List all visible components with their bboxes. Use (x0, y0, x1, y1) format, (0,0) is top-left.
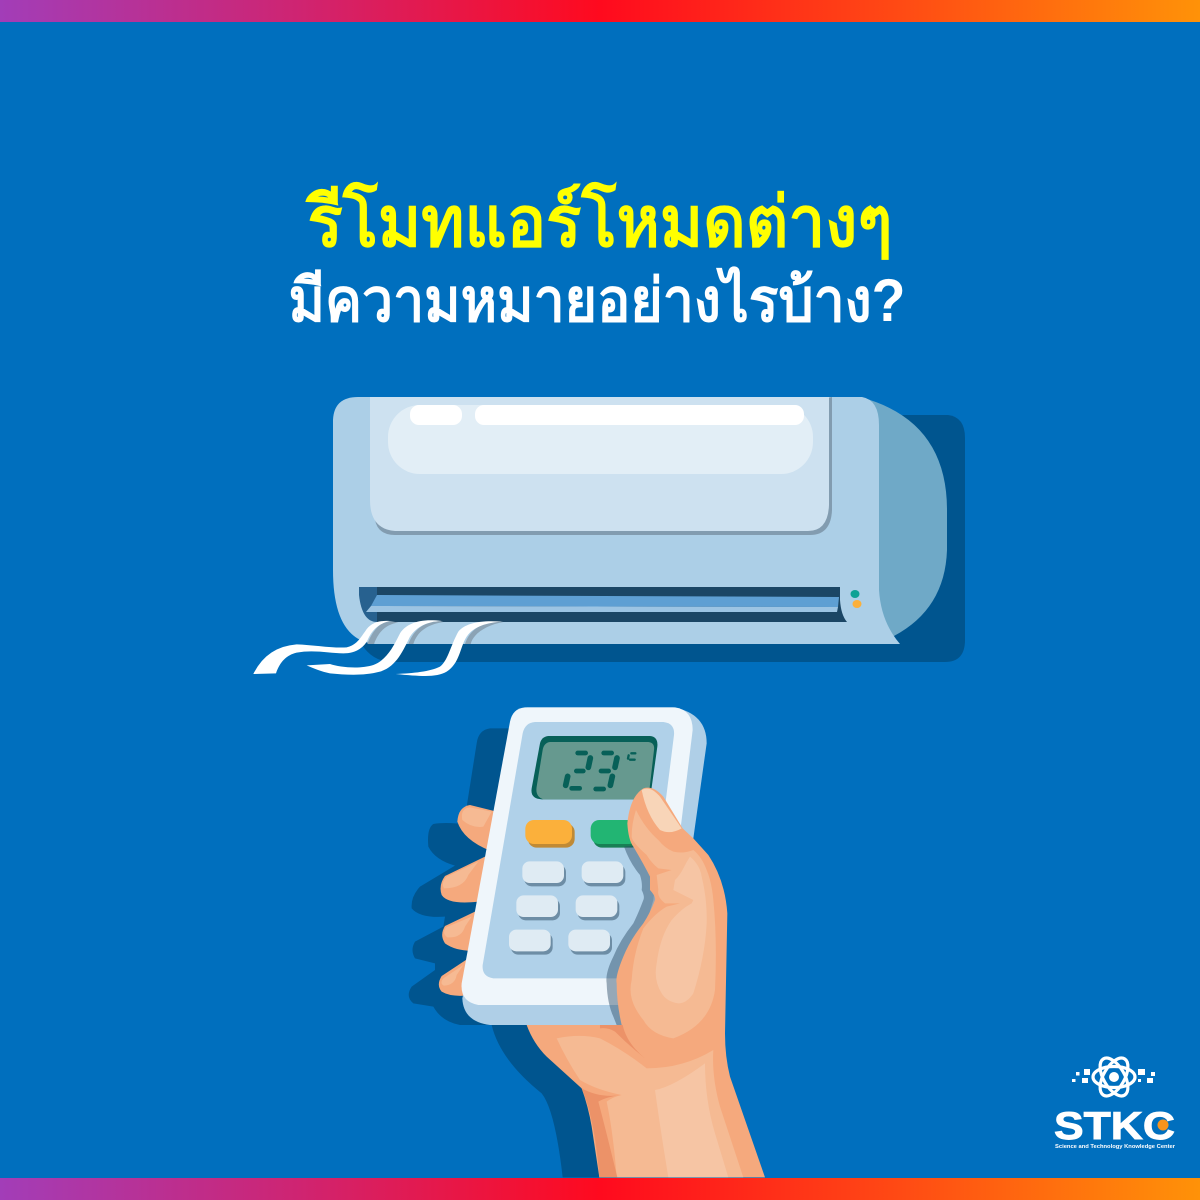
logo orange dot (1158, 1120, 1168, 1130)
front panel (370, 397, 829, 531)
logo tagline: Science and Technology Knowledge Center (1055, 1144, 1176, 1150)
thumb light area (656, 857, 707, 1003)
lcd frame (531, 736, 657, 799)
front panel shadow (375, 397, 832, 535)
keypad buttons (509, 861, 625, 955)
title line 1: รีโมทแอร์โหมดต่างๆ (305, 181, 892, 261)
ribbon 1 (253, 621, 390, 674)
air vent (377, 587, 847, 622)
palm highlight (557, 1036, 743, 1177)
title (288, 181, 906, 334)
logo atom (1093, 1054, 1135, 1100)
remote back (462, 707, 707, 1025)
palm crease (600, 1025, 645, 1058)
lcd screen (531, 736, 657, 799)
finger 3 base (442, 910, 478, 951)
ac side panel (860, 397, 947, 640)
airflow shadows (367, 621, 503, 644)
hand (527, 788, 765, 1177)
airflow (253, 620, 503, 676)
white highlight long (475, 405, 804, 425)
stkc logo (1054, 1054, 1176, 1150)
thumb nail (642, 788, 682, 832)
remote and hand shadow (409, 728, 607, 1177)
louver bottom (366, 606, 838, 612)
airflow ribbons (253, 620, 502, 676)
top gradient bar (0, 0, 1200, 22)
lcd glass (536, 742, 654, 799)
finger 1 (457, 805, 497, 851)
finger 2 (441, 855, 488, 902)
logo wordmark: STKC (1054, 1105, 1175, 1148)
ac drop shadow (355, 415, 965, 662)
remote face (483, 722, 674, 978)
orange button shadow (528, 823, 575, 848)
finger 4 base (439, 958, 468, 996)
hand base (527, 788, 765, 1177)
finger 4 (439, 958, 468, 996)
white highlight short (410, 405, 462, 425)
ac body (333, 397, 900, 644)
remote front (462, 707, 693, 1005)
logo pixel dots (1072, 1069, 1155, 1083)
finger 2 highlight (443, 862, 478, 888)
status light green (850, 590, 860, 598)
finger 1 highlight (462, 807, 492, 827)
panel gloss (388, 405, 813, 474)
thumb shadow on remote (606, 843, 667, 1025)
wrist shade (582, 1088, 622, 1177)
status light orange (852, 600, 862, 608)
ribbon 2 (307, 620, 442, 675)
finger 1 base (457, 805, 497, 851)
lcd digits 23 degrees (566, 753, 635, 789)
ribbon 3 (396, 621, 502, 676)
louver top (371, 595, 839, 607)
finger 3 (442, 910, 478, 951)
finger 2 base (441, 855, 488, 902)
orange button top (525, 820, 572, 844)
green button shadow (593, 823, 640, 848)
hand holding remote (drawn at 1/3 scale) (409, 707, 765, 1177)
title line 2: มีความหมายอย่างไรบ้าง? (288, 265, 906, 334)
finger 4 highlight (441, 965, 463, 986)
orange button (525, 820, 575, 848)
wrist highlight (655, 1063, 728, 1177)
green button top (591, 820, 637, 844)
vent left end (359, 587, 377, 622)
air conditioner (253, 397, 965, 676)
louver (366, 595, 839, 612)
finger 3 highlight (444, 917, 472, 937)
green button (591, 820, 640, 848)
thumb mid tone (631, 810, 716, 1038)
bottom gradient bar (0, 1178, 1200, 1200)
